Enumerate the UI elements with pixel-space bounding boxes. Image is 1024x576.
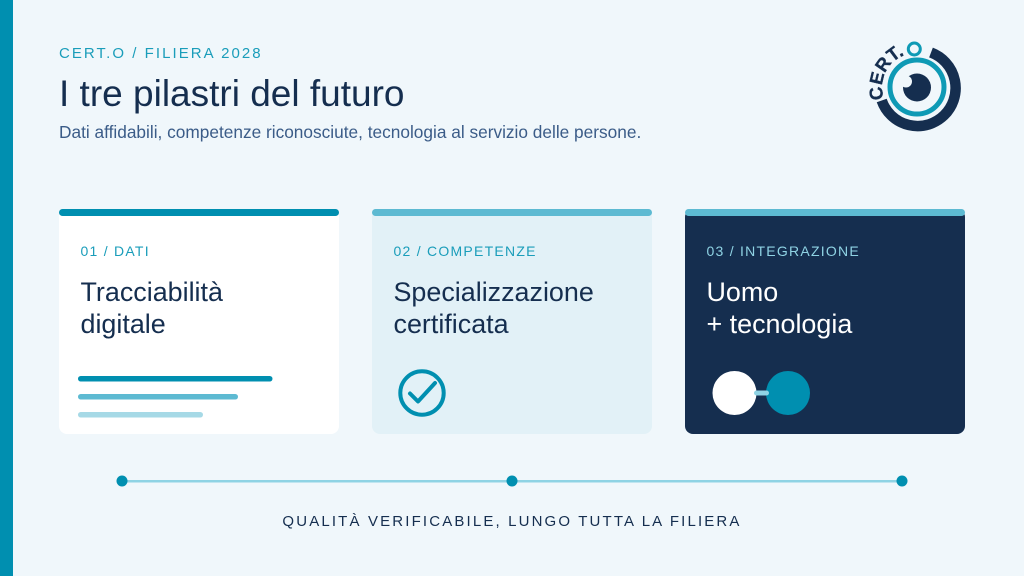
panel: integrazione: [685, 209, 965, 434]
logo: CERT.O eye: CERT.: [869, 46, 904, 100]
competenze top bar: [372, 209, 652, 216]
competenze heading: Specializzazione: [394, 277, 594, 307]
dati heading: digitale: [80, 309, 166, 339]
competenze label: 02 / COMPETENZE: [394, 242, 537, 258]
footer caption: QUALITÀ VERIFICABILE, LUNGO TUTTA LA FILIERA: [282, 513, 742, 530]
competenze heading: certificata: [394, 309, 509, 339]
dati heading: Tracciabilità: [80, 277, 223, 307]
dati heading: [80, 277, 223, 339]
panel: dati: [59, 209, 339, 434]
integrazione heading: Uomo: [706, 277, 778, 307]
integrazione label: 03 / INTEGRAZIONE: [706, 242, 860, 258]
subtitle: Dati affidabili, competenze riconosciute, tecnologia al servizio delle persone.: [59, 122, 641, 142]
logo: CERT.O eye: [869, 42, 961, 132]
integrazione heading: [706, 277, 852, 339]
title: I tre pilastri del futuro: [59, 72, 404, 114]
dati top bar: [59, 209, 339, 216]
icon: check circle: [398, 369, 446, 417]
icon: data lines: [78, 376, 272, 418]
integrazione top bar: [685, 209, 965, 216]
dati label: 01 / DATI: [80, 242, 150, 258]
integrazione heading: + tecnologia: [706, 309, 852, 339]
left accent band: [0, 0, 13, 576]
competenze heading: [394, 277, 594, 339]
eyebrow label: CERT.O / FILIERA 2028: [59, 45, 263, 62]
icon: human and technology circles: [712, 371, 810, 415]
panel: competenze: [372, 209, 652, 434]
timeline: [116, 476, 908, 486]
